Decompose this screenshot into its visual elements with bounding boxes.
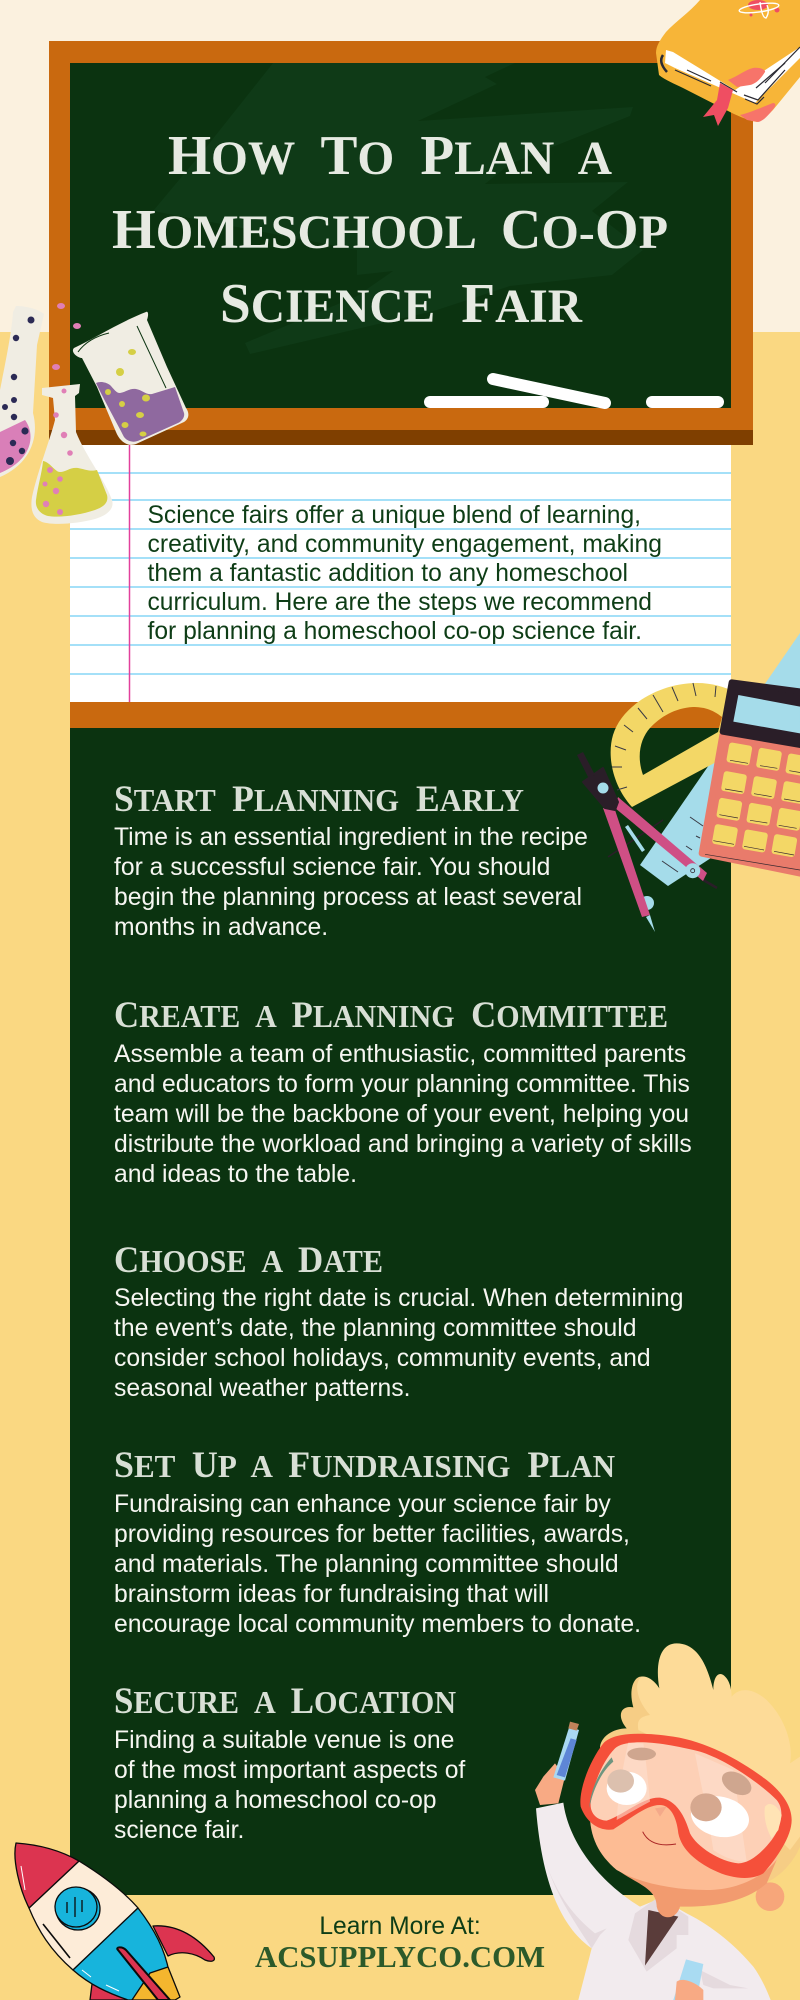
- title: [112, 125, 668, 335]
- step 5: science fair.: [114, 1817, 244, 1844]
- hair: [600, 1643, 800, 1883]
- ear: [756, 1882, 784, 1911]
- title: HOMESCHOOL CO-OP: [112, 199, 668, 261]
- icon: pink bubbles: [52, 303, 81, 370]
- step 4: Fundraising can enhance your science fair by: [114, 1491, 611, 1518]
- title: SCIENCE FAIR: [220, 273, 583, 335]
- step 1: [114, 779, 588, 941]
- step 4: providing resources for better facilities, awards,: [114, 1521, 630, 1548]
- neck and face: [590, 1747, 783, 1917]
- step 2: distribute the workload and bringing a variety of skills: [114, 1131, 692, 1158]
- icon: yellow conical flask: [31, 384, 113, 524]
- arm and lab coat: [536, 1803, 771, 2000]
- step 5: Finding a suitable venue is one: [114, 1727, 454, 1754]
- step 1: months in advance.: [114, 914, 328, 941]
- step 5: [114, 1681, 465, 1844]
- panel: chalkboard: [49, 41, 753, 445]
- step 3: Selecting the right date is crucial. When determining: [114, 1285, 683, 1312]
- step 3: [114, 1240, 683, 1402]
- step 2: team will be the backbone of your event, helping you: [114, 1101, 689, 1128]
- icon: rocket: [15, 1843, 214, 2000]
- step 4: encourage local community members to donate.: [114, 1611, 641, 1638]
- intro text: for planning a homeschool co-op science fair.: [148, 618, 642, 645]
- step 2: and educators to form your planning committee. This: [114, 1071, 690, 1098]
- intro text: Science fairs offer a unique blend of learning,: [148, 502, 641, 529]
- held vial: [673, 1959, 703, 2000]
- step 1: begin the planning process at least several: [114, 884, 582, 911]
- step 1: for a successful science fair. You should: [114, 854, 550, 881]
- step 5: SECURE A LOCATION: [114, 1681, 456, 1722]
- panel: notebook paper: [70, 445, 731, 702]
- step 4: SET UP A FUNDRAISING PLAN: [114, 1445, 615, 1486]
- step 3: seasonal weather patterns.: [114, 1375, 410, 1402]
- icon: pink tilted flask: [0, 306, 44, 477]
- icon: scientist child: [535, 1643, 800, 2000]
- icon: protractor: [611, 683, 735, 807]
- step 1: Time is an essential ingredient in the recipe: [114, 824, 588, 851]
- step 4: brainstorm ideas for fundraising that will: [114, 1581, 549, 1608]
- step 2: and ideas to the table.: [114, 1161, 357, 1188]
- panel: steps board: [70, 702, 731, 1895]
- step 2: CREATE A PLANNING COMMITTEE: [114, 995, 668, 1036]
- intro text: them a fantastic addition to any homeschool: [148, 560, 628, 587]
- hand and test tube: [535, 1722, 579, 1805]
- icon: purple beaker: [73, 312, 188, 445]
- step 5: planning a homeschool co-op: [114, 1787, 437, 1814]
- icon: ruler triangle: [640, 633, 800, 886]
- step 3: the event’s date, the planning committee should: [114, 1315, 636, 1342]
- step 4: [114, 1445, 641, 1638]
- step 3: consider school holidays, community events, and: [114, 1345, 651, 1372]
- step 5: of the most important aspects of: [114, 1757, 465, 1784]
- intro text: creativity, and community engagement, making: [148, 531, 662, 558]
- title: HOW TO PLAN A: [168, 125, 612, 187]
- intro text: [148, 502, 662, 645]
- icon: book: [656, 0, 800, 126]
- intro text: curriculum. Here are the steps we recommend: [148, 589, 652, 616]
- step 3: CHOOSE A DATE: [114, 1240, 383, 1281]
- footer call to action: Learn More At:: [319, 1913, 481, 1940]
- step 1: START PLANNING EARLY: [114, 779, 524, 820]
- step 2: [114, 995, 692, 1188]
- footer call to action: ACSUPPLYCO.COM: [255, 1939, 545, 1974]
- step 2: Assemble a team of enthusiastic, committed parents: [114, 1041, 686, 1068]
- icon: compass: [577, 752, 717, 932]
- footer call to action: [255, 1913, 545, 1974]
- goggles: [580, 1734, 792, 1878]
- icon: calculator: [702, 682, 800, 877]
- step 4: and materials. The planning committee should: [114, 1551, 619, 1578]
